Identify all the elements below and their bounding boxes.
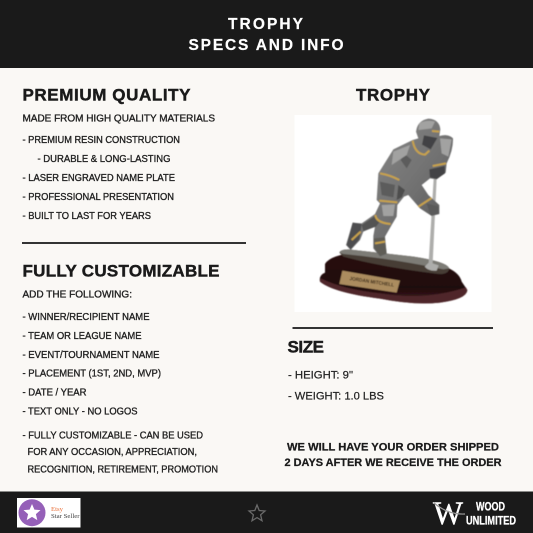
panel: premium quality (22, 86, 215, 222)
shading details (347, 135, 445, 256)
header title: SPECS AND INFO (188, 37, 344, 54)
callout: shipping note: 2 DAYS AFTER WE RECEIVE THE ORDER (284, 457, 502, 469)
header band (0, 0, 533, 68)
gold trims (352, 131, 446, 243)
heading: size: SIZE (288, 338, 324, 357)
text: occasions note: FOR ANY OCCASION, APPRECIATION, (28, 447, 197, 458)
text: weight: - WEIGHT: 1.0 LBS (288, 390, 384, 402)
footer band (0, 491, 533, 533)
list: quality features: - PROFESSIONAL PRESENTATION (22, 192, 174, 203)
text: materials intro: MADE FROM HIGH QUALITY MATERIALS (22, 114, 215, 124)
text: add the following: ADD THE FOLLOWING: (22, 290, 132, 300)
list: customization options (22, 312, 161, 417)
list: customization options: - TEXT ONLY - NO LOGOS (22, 406, 138, 417)
list: quality features: - DURABLE & LONG-LASTING (38, 154, 170, 165)
heading: premium quality: PREMIUM QUALITY (22, 86, 191, 104)
badge: etsy star seller: Star Seller (51, 514, 80, 520)
name plate: JORDAN MITCHELL (349, 276, 394, 289)
hockey stick (425, 178, 439, 271)
heading: fully customizable: FULLY CUSTOMIZABLE (22, 262, 220, 280)
name plate (339, 271, 400, 293)
list: customization options: - WINNER/RECIPIENT NAME (22, 312, 150, 323)
callout: shipping note (284, 442, 502, 469)
list: quality features: - BUILT TO LAST FOR YEARS (22, 211, 151, 222)
header title (188, 16, 344, 54)
callout: shipping note: WE WILL HAVE YOUR ORDER SHIPPED (287, 442, 499, 454)
trophy base (320, 252, 467, 303)
text: occasions note: RECOGNITION, RETIREMENT, PROMOTION (28, 464, 218, 475)
logo mark: W: W (433, 496, 464, 532)
list: quality features: - PREMIUM RESIN CONSTRUCTION (22, 135, 180, 146)
list: customization options: - DATE / YEAR (22, 388, 87, 399)
header title: TROPHY (228, 16, 304, 33)
logo: wood unlimited (433, 496, 516, 532)
logo: wood unlimited: UNLIMITED (466, 514, 516, 528)
text: height: - HEIGHT: 9" (288, 370, 353, 382)
panel: fully customizable (22, 262, 220, 475)
list: quality features: - LASER ENGRAVED NAME PLATE (22, 173, 175, 184)
text: occasions note (22, 430, 218, 475)
highlights (382, 121, 452, 216)
photo: hockey player trophy (294, 115, 492, 312)
icon: purple star seal (18, 499, 46, 526)
player silhouette (346, 119, 453, 257)
panel: size (288, 338, 384, 402)
list: customization options: - EVENT/TOURNAMENT NAME (22, 350, 160, 361)
icon: outlined star (249, 505, 265, 521)
ice plate (339, 249, 449, 274)
list: customization options: - PLACEMENT (1ST, 2ND, MVP) (22, 369, 161, 380)
heading: trophy: TROPHY (356, 86, 431, 104)
list: quality features (22, 135, 180, 222)
badge: etsy star seller (17, 498, 80, 528)
badge: etsy star seller: Etsy (51, 507, 63, 513)
list: customization options: - TEAM OR LEAGUE NAME (22, 331, 142, 342)
text: occasions note: - FULLY CUSTOMIZABLE - CAN BE USED (22, 430, 203, 441)
logo: wood unlimited: WOOD (476, 500, 505, 514)
